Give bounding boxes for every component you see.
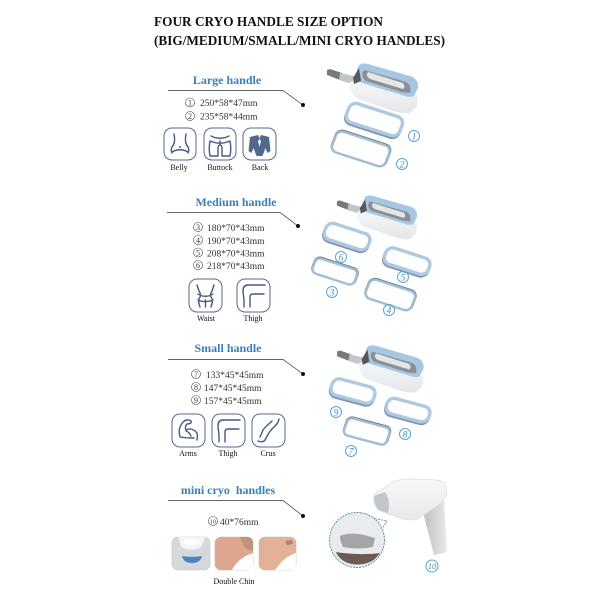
- photo: applicator on chin: [172, 537, 210, 570]
- number 4: 4: [387, 306, 392, 316]
- size: mini handle: 10: [210, 520, 216, 526]
- leader line: small handle: [168, 360, 305, 376]
- leader line: mini handles: [168, 500, 305, 518]
- number 1: 1: [412, 132, 416, 142]
- heading: small handle: Small handle: [194, 341, 262, 355]
- leader line: large handle: [168, 90, 305, 107]
- sizes: small handle: [192, 370, 264, 407]
- sizes: small handle: 8: [194, 383, 198, 392]
- icon: buttock: [204, 128, 236, 160]
- sizes: medium handle: 180*70*43mm: [207, 224, 265, 234]
- number 7: 7: [349, 447, 355, 457]
- ring 6: [321, 222, 372, 254]
- number 8: 8: [403, 430, 408, 440]
- number 6: 6: [339, 253, 344, 263]
- icon: arms: [172, 414, 205, 447]
- leader line: medium handle: [167, 212, 300, 228]
- photo: chin side one: [215, 537, 253, 570]
- sizes: small handle: 133*45*45mm: [206, 371, 264, 381]
- title: [154, 14, 445, 48]
- label: thigh: Thigh: [243, 314, 263, 323]
- heading: large handle: Large handle: [193, 73, 262, 87]
- heading: medium handle: Medium handle: [195, 195, 277, 209]
- ring 4: [364, 278, 417, 312]
- heading: mini cryo handles: mini cryo handles: [181, 483, 276, 497]
- sizes: large handle: 2: [188, 112, 192, 121]
- sizes: large handle: [186, 98, 258, 122]
- label: belly: Belly: [170, 163, 188, 172]
- icon: thigh: [237, 279, 270, 312]
- label: crus: Crus: [260, 449, 276, 458]
- ring 1: [343, 102, 405, 139]
- icon: crus: [252, 414, 285, 447]
- label: arms: Arms: [179, 449, 197, 458]
- ring 7: [343, 417, 391, 446]
- title: FOUR CRYO HANDLE SIZE OPTION: [154, 14, 383, 29]
- sizes: medium handle: [194, 222, 265, 272]
- handle stem: [423, 500, 447, 555]
- panel: small handle info: [168, 341, 305, 458]
- sizes: small handle: 157*45*45mm: [204, 397, 262, 407]
- number 2: 2: [400, 160, 405, 170]
- label: thigh: Thigh: [218, 449, 238, 458]
- label: back: Back: [252, 163, 268, 172]
- detail magnifier: [330, 512, 387, 568]
- ring 3: [311, 257, 359, 286]
- handle assembly: [337, 195, 417, 239]
- number 3: 3: [329, 288, 335, 298]
- handle head: [374, 479, 447, 520]
- label: double chin: Double Chin: [213, 577, 255, 586]
- sizes: small handle: 147*45*45mm: [204, 384, 262, 394]
- label: buttock: Buttock: [207, 163, 233, 172]
- sizes: medium handle: 6: [196, 261, 200, 270]
- sizes: medium handle: 218*70*43mm: [207, 262, 265, 272]
- panel: mini cryo handle info: [168, 483, 305, 586]
- handle assembly: [337, 345, 424, 393]
- device: medium handle: [311, 195, 432, 316]
- sizes: medium handle: 4: [196, 236, 200, 245]
- panel: medium handle info: [167, 195, 300, 323]
- number 5: 5: [401, 273, 406, 283]
- icon: waist: [189, 279, 222, 312]
- panel: large handle info: [164, 73, 305, 172]
- title: (BIG/MEDIUM/SMALL/MINI CRYO HANDLES): [154, 33, 445, 48]
- sizes: large handle: 250*58*47mm: [200, 99, 258, 109]
- size: mini handle: 40*76mm: [220, 518, 259, 528]
- ring 9: [328, 377, 377, 407]
- icon: belly: [164, 128, 196, 160]
- device: large handle: [327, 63, 420, 170]
- ring 5: [381, 246, 432, 278]
- sizes: large handle: 235*58*44mm: [200, 112, 258, 122]
- label: waist: Waist: [197, 314, 216, 323]
- photo: chin side two: [259, 537, 296, 570]
- handle assembly: [327, 63, 418, 113]
- sizes: small handle: 9: [194, 396, 198, 405]
- sizes: medium handle: 3: [196, 223, 200, 232]
- sizes: medium handle: 5: [196, 248, 200, 257]
- sizes: small handle: 7: [194, 370, 198, 379]
- sizes: medium handle: 208*70*43mm: [207, 250, 265, 260]
- ring 2: [330, 130, 392, 168]
- device: mini handle: [330, 479, 447, 572]
- ring 8: [384, 397, 432, 425]
- number 9: 9: [334, 408, 339, 418]
- sizes: large handle: 1: [188, 98, 192, 107]
- device: small handle: [328, 345, 432, 457]
- handle opening: [374, 492, 389, 513]
- size: mini handle: [208, 516, 259, 528]
- icon: back: [243, 128, 276, 160]
- icon: thigh: [212, 414, 245, 447]
- number 10: 10: [428, 562, 436, 571]
- sizes: medium handle: 190*70*43mm: [207, 237, 265, 247]
